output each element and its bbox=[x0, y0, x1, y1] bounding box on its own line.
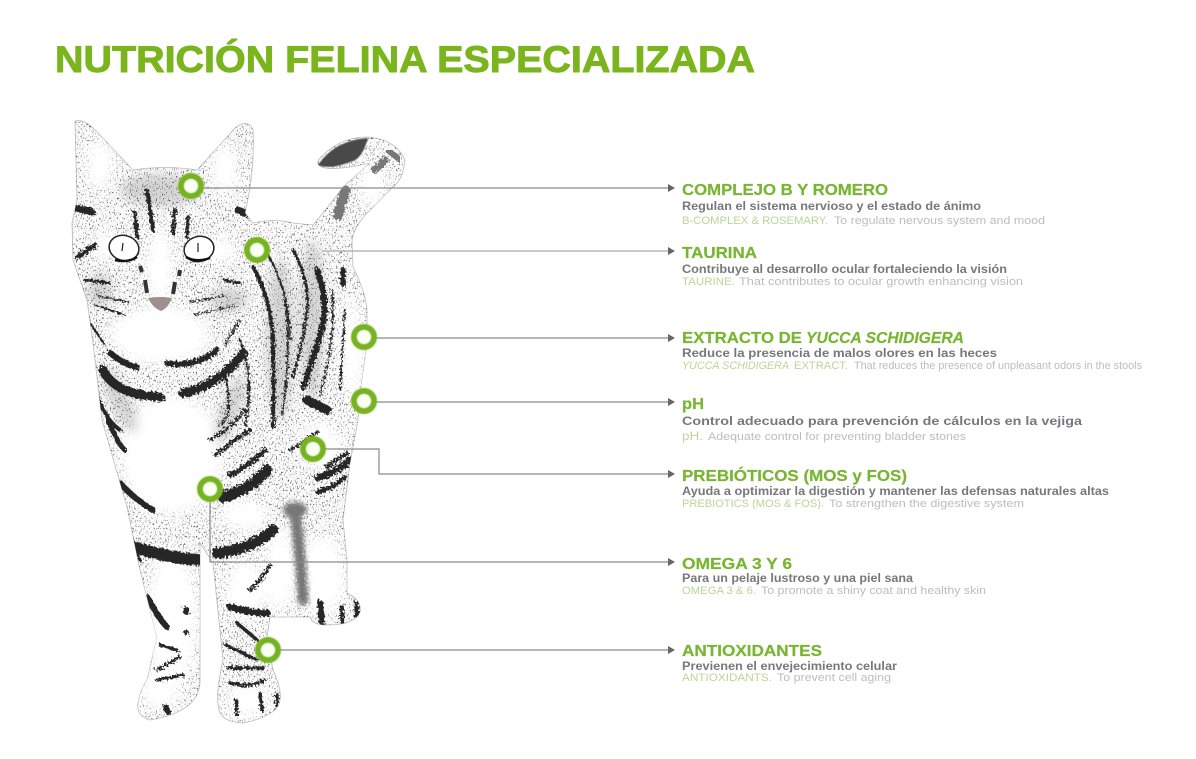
connector: yucca bbox=[376, 334, 675, 342]
text block: prebióticos bbox=[682, 466, 1109, 510]
text block: omega: Para un pelaje lustroso y una piel sana bbox=[682, 571, 913, 585]
text block: yucca bbox=[682, 330, 1142, 372]
connector: prebióticos bbox=[325, 449, 675, 478]
text block: complejo B: COMPLEJO B Y ROMERO bbox=[682, 182, 888, 199]
connector: omega bbox=[210, 500, 675, 566]
text block: omega: OMEGA 3 & 6. bbox=[682, 585, 756, 597]
text block: pH: Adequate control for preventing bladder stones bbox=[708, 431, 967, 443]
text block: taurina bbox=[682, 245, 1023, 288]
text block: prebióticos: PREBIÓTICOS (MOS y FOS) bbox=[682, 466, 907, 485]
text block: prebióticos: Ayuda a optimizar la digestión y mantener las defensas naturales altas bbox=[682, 484, 1109, 498]
text block: prebióticos: PREBIOTICS (MOS & FOS). bbox=[682, 498, 824, 510]
text block: complejo B bbox=[682, 182, 1045, 227]
text block: antioxidantes: ANTIOXIDANTES bbox=[682, 643, 822, 660]
text block: antioxidantes: Previenen el envejecimiento celular bbox=[682, 659, 897, 673]
text block: antioxidantes: ANTIOXIDANTS. bbox=[682, 672, 772, 684]
text block: pH: pH bbox=[682, 396, 704, 413]
tail tip bbox=[318, 138, 368, 167]
text block: antioxidantes: To prevent cell aging bbox=[777, 672, 891, 684]
cat eyes bbox=[106, 232, 217, 265]
text block: yucca: EXTRACTO DE bbox=[682, 330, 802, 347]
text block: yucca: Reduce la presencia de malos olores en las heces bbox=[682, 346, 997, 360]
cat illustration bbox=[60, 110, 420, 730]
text block: taurina: That contributes to ocular growth enhancing vision bbox=[739, 276, 1023, 288]
text block: complejo B: Regulan el sistema nervioso y el estado de ánimo bbox=[682, 199, 981, 213]
text block: yucca: EXTRACT. bbox=[794, 360, 848, 372]
connector: complejo B bbox=[203, 184, 675, 192]
text block: prebióticos: To strengthen the digestive system bbox=[829, 498, 1024, 510]
text block: omega: To promote a shiny coat and healthy skin bbox=[761, 585, 986, 597]
text block: omega: OMEGA 3 Y 6 bbox=[682, 556, 792, 573]
text block: complejo B: To regulate nervous system and mood bbox=[834, 215, 1045, 227]
light fur patches bbox=[86, 139, 386, 718]
tonal shading bbox=[88, 174, 324, 447]
connector: pH bbox=[376, 398, 675, 406]
text block: pH: Control adecuado para prevención de cálculos en la vejiga bbox=[682, 414, 1082, 428]
text block: pH bbox=[682, 396, 1082, 443]
connector: antioxidantes bbox=[280, 646, 675, 654]
text block: yucca: That reduces the presence of unpleasant odors in the stools bbox=[854, 360, 1142, 372]
connector: taurina bbox=[322, 247, 675, 255]
text block: yucca: YUCCA SCHIDIGERA bbox=[806, 330, 964, 347]
text block: pH: pH. bbox=[682, 429, 703, 443]
text block: antioxidantes bbox=[682, 643, 897, 684]
marker rings bbox=[181, 176, 374, 660]
text block: taurina: TAURINE. bbox=[682, 276, 735, 288]
text block: complejo B: B-COMPLEX & ROSEMARY. bbox=[682, 215, 828, 227]
title: NUTRICIÓN FELINA ESPECIALIZADA bbox=[55, 38, 755, 80]
text block: yucca: YUCCA SCHIDIGERA bbox=[682, 360, 789, 372]
text block: omega bbox=[682, 556, 986, 597]
text block: taurina: Contribuye al desarrollo ocular fortaleciendo la visión bbox=[682, 262, 1007, 276]
cat nose bbox=[140, 266, 180, 311]
tabby stripes bbox=[75, 150, 400, 716]
text block: taurina: TAURINA bbox=[682, 245, 757, 262]
